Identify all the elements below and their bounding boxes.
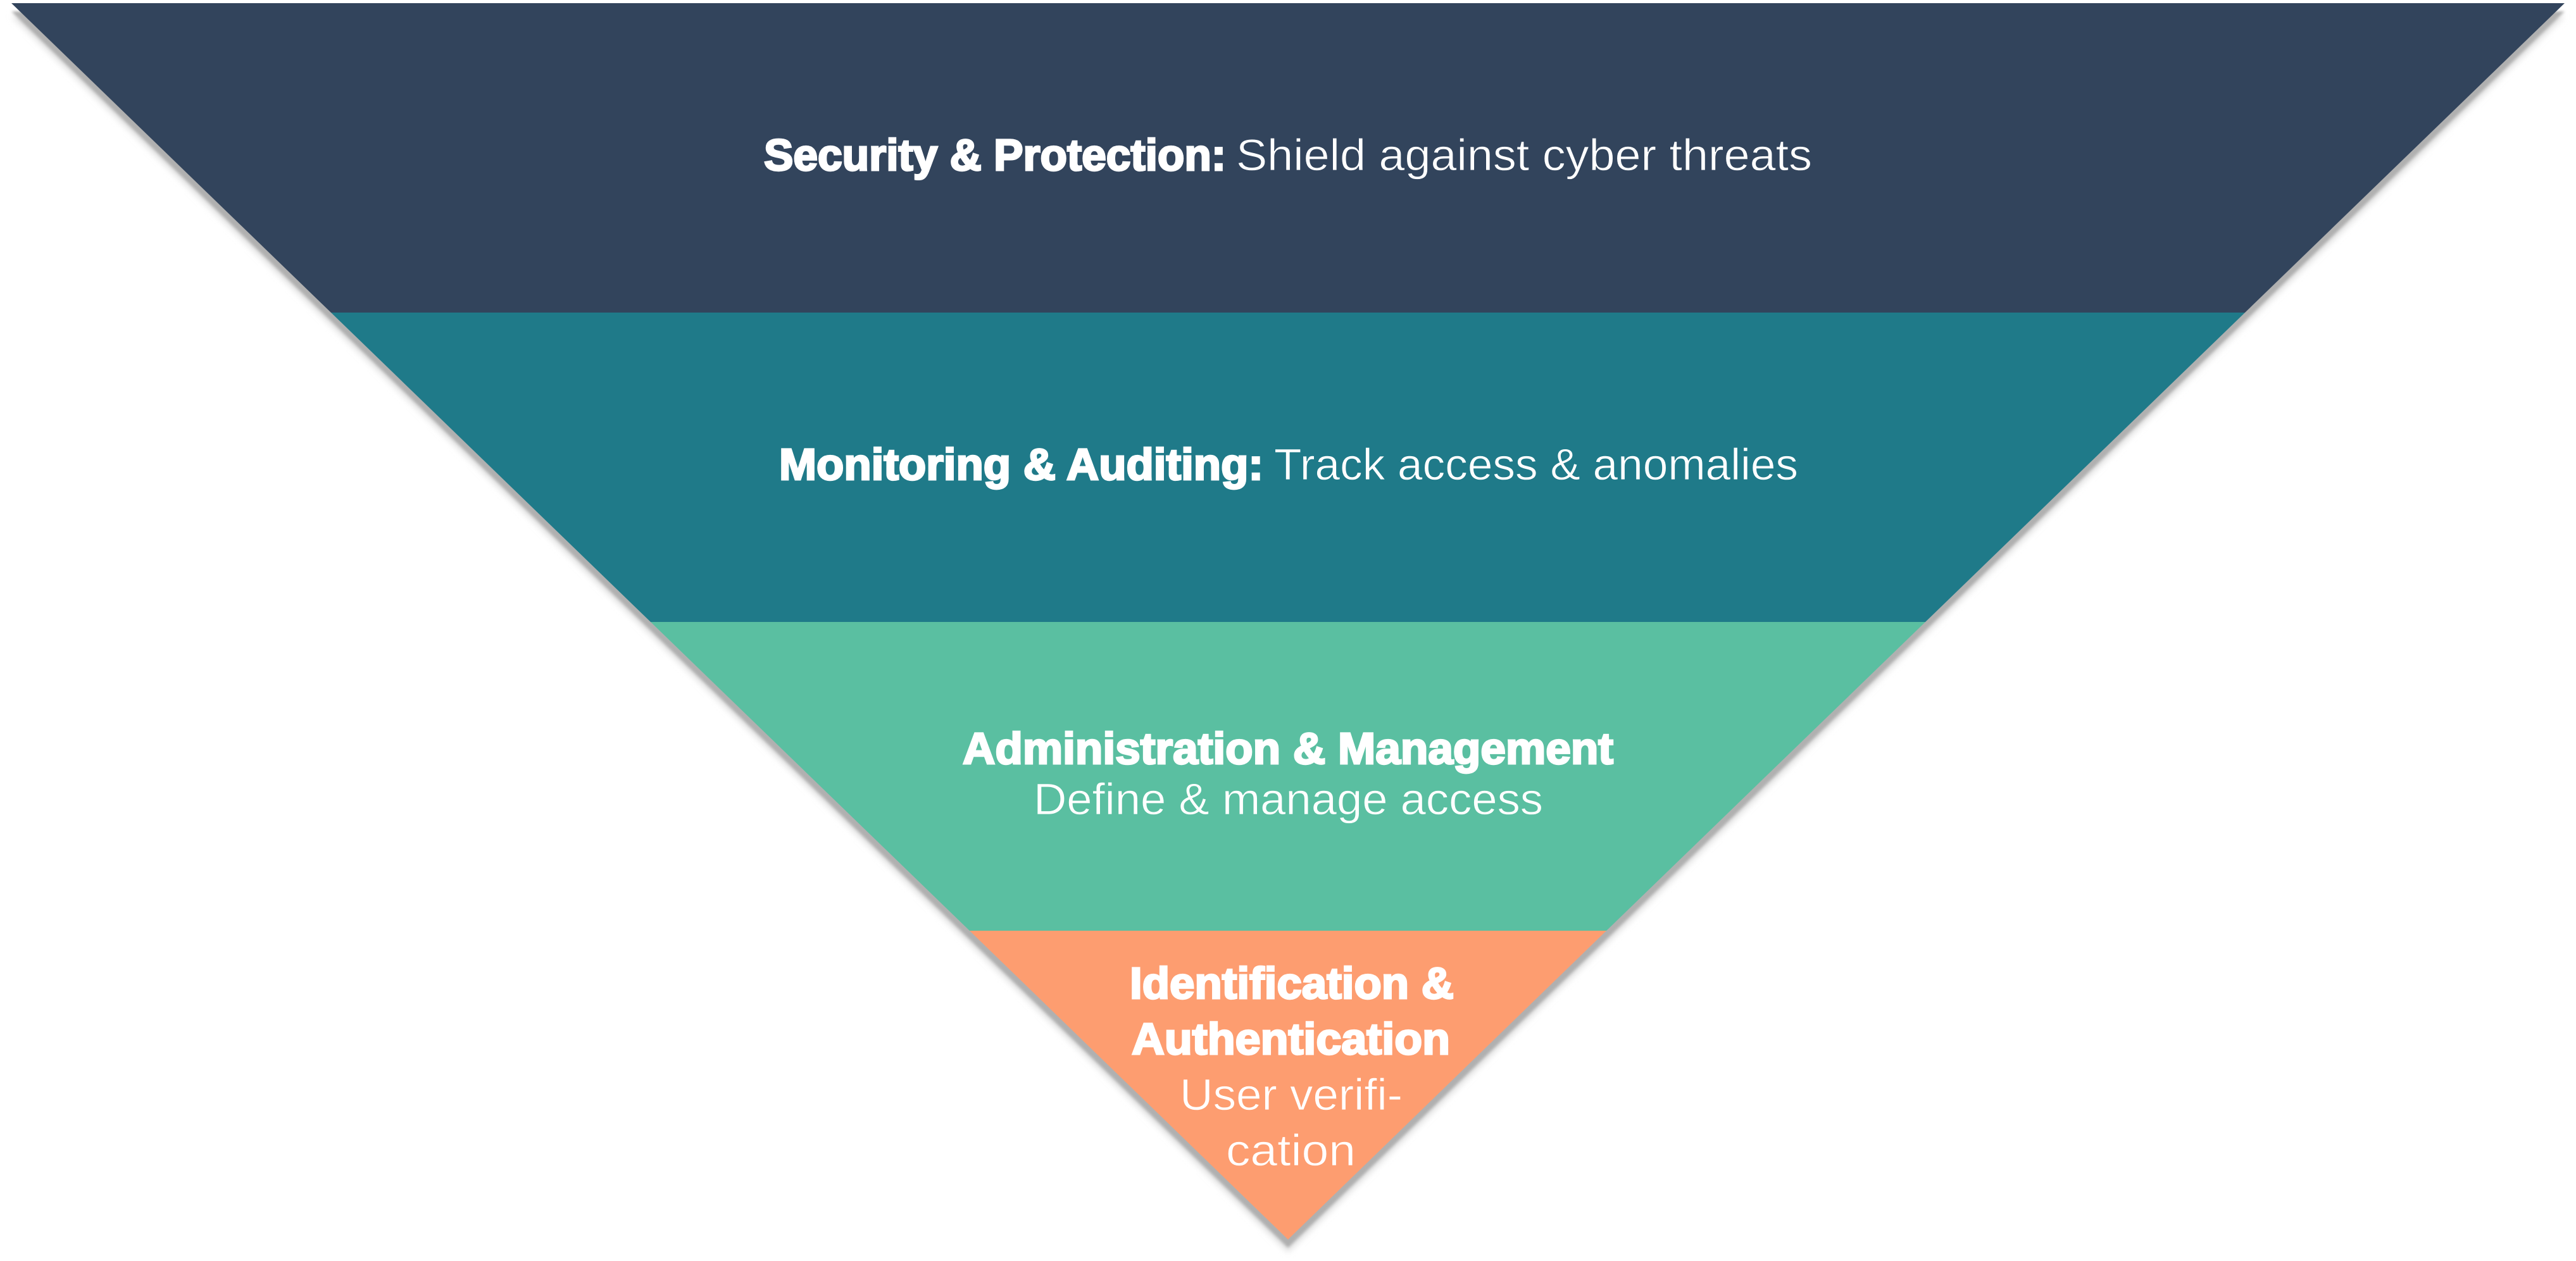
text: Security & Protection xyxy=(764,130,1812,180)
text: Administration & Management xyxy=(963,724,1613,824)
text: Identification & Authentication: Identification & xyxy=(1130,959,1454,1008)
text: Administration & Management: Administration & Management xyxy=(963,724,1613,773)
text: Identification & Authentication: Authentication xyxy=(1132,1014,1450,1064)
text: Identification & Authentication xyxy=(1130,959,1454,1175)
text: Security & Protection: Security & Protection: xyxy=(764,130,1226,180)
text: Monitoring & Auditing: Monitoring & Auditing: xyxy=(779,440,1263,489)
text: Security & Protection: Shield against cyber threats xyxy=(1236,130,1812,180)
text: Administration & Management: Define & manage access xyxy=(1034,774,1543,824)
panel: Security & Protection layer xyxy=(11,3,2565,313)
text: Monitoring & Auditing: Track access & anomalies xyxy=(1274,440,1798,489)
panel: Administration & Management layer xyxy=(651,622,1925,931)
text: Monitoring & Auditing xyxy=(779,440,1798,489)
panel: Monitoring & Auditing layer xyxy=(331,313,2245,622)
text: Identification & Authentication: User verifi- xyxy=(1180,1070,1403,1119)
panel: Identification & Authentication layer xyxy=(970,931,1606,1239)
text: Identification & Authentication: cation xyxy=(1226,1126,1356,1175)
